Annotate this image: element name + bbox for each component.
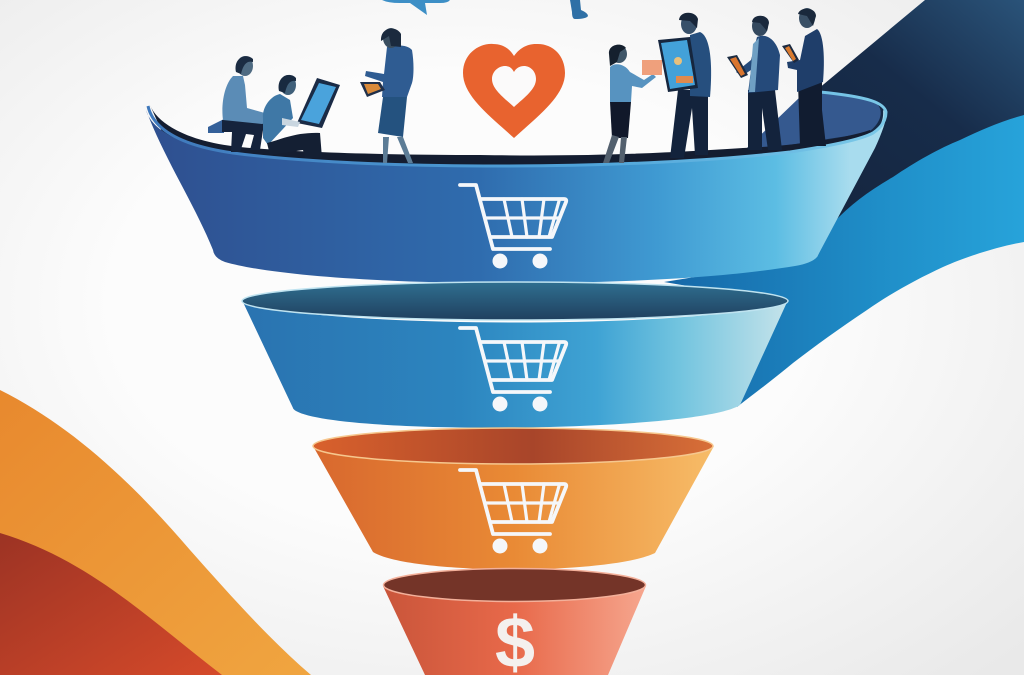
people: man with large tablet <box>658 13 711 158</box>
tier 3 body <box>313 446 714 569</box>
tier 2 body <box>242 300 788 428</box>
tier 3 opening <box>313 428 713 464</box>
tier 2 opening <box>242 282 788 320</box>
icon: heart <box>463 44 565 138</box>
tier 1 rim highlight <box>148 92 886 166</box>
people: woman with phone <box>603 45 662 163</box>
funnel tier 2 <box>242 282 788 428</box>
swoosh: navy ribbon <box>747 0 1024 226</box>
funnel tier 4 <box>383 568 646 675</box>
chat bubble <box>382 0 450 15</box>
icon: cart 1 <box>460 185 566 268</box>
swoosh: blue ribbon <box>664 115 1024 407</box>
people: standing woman with tablet <box>360 28 414 163</box>
funnel tier 3 <box>313 428 714 569</box>
people: man with tablet, middle <box>727 16 782 150</box>
tier 1 dark interior <box>150 105 875 185</box>
icon: cart 3 <box>460 470 566 554</box>
funnel tier 1 <box>146 92 887 283</box>
tier 4 opening <box>384 568 646 602</box>
swoosh: orange wave <box>0 390 311 675</box>
small figure foot <box>570 0 588 19</box>
tier 1 body <box>146 110 887 283</box>
people: seated pair with laptop <box>208 56 340 158</box>
tier 4 body <box>383 586 646 675</box>
swoosh: red wave <box>0 533 222 675</box>
icon: cart 2 <box>460 328 566 412</box>
people: man with tablet, right <box>782 8 826 146</box>
tier 1 inner back wall <box>743 92 881 152</box>
